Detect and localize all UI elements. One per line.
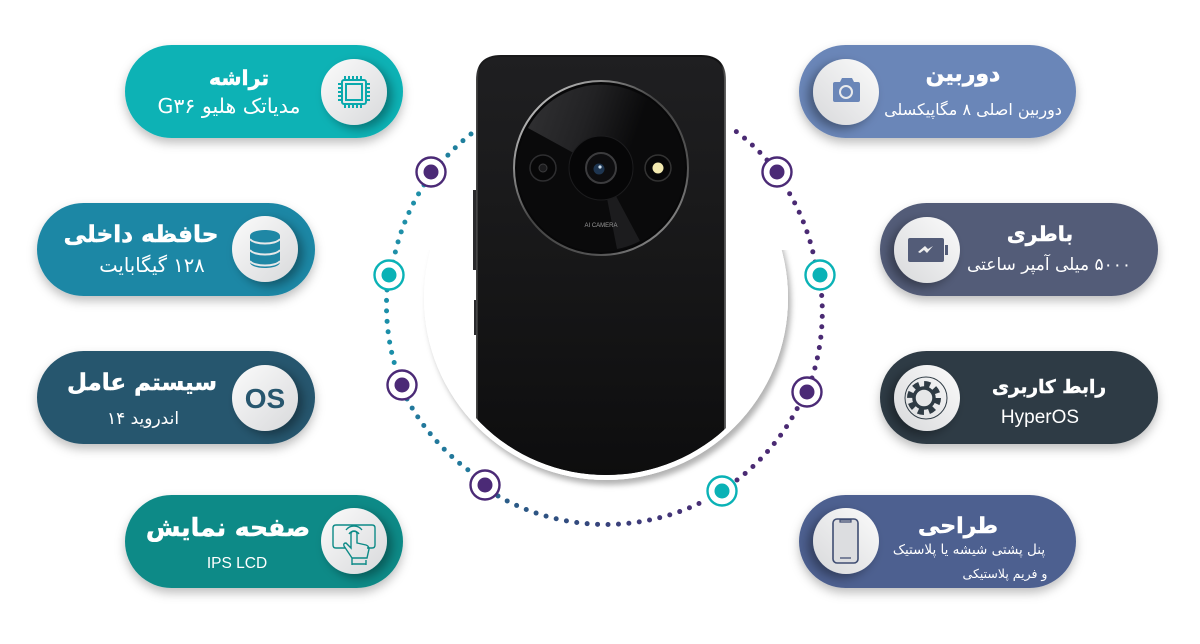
phone: [473, 55, 726, 478]
icon: touch screen: [321, 508, 387, 574]
panel: user interface: [880, 351, 1158, 444]
white circle behind phone: [424, 250, 794, 488]
heading: battery: باطری: [1007, 222, 1073, 246]
phone body: [476, 55, 726, 478]
panel: operating system: [37, 351, 315, 444]
node: bottom left purple: [470, 470, 500, 500]
left lens: [530, 155, 556, 181]
icon: OS: [232, 365, 298, 431]
icon: camera: [813, 59, 879, 125]
heading: user interface: رابط کاربری: [992, 377, 1106, 398]
heading: camera: دوربین: [926, 62, 1000, 87]
camera module: [514, 81, 688, 255]
icon: OS: OS: [245, 383, 285, 414]
text: camera value: دوربین اصلی ۸ مگاپیکسلی: [884, 100, 1062, 120]
text: battery value: ۵۰۰۰ میلی آمپر ساعتی: [967, 253, 1131, 275]
text: user interface value: HyperOS: [1001, 407, 1079, 428]
side buttons: [473, 190, 476, 335]
node: upper right purple: [762, 158, 792, 186]
heading: display: صفحه نمایش: [146, 513, 310, 542]
node: lower left purple: [388, 370, 416, 400]
node: bottom right teal: [708, 476, 736, 506]
heading: operating system: سیستم عامل: [67, 370, 217, 396]
icon: database: [232, 216, 298, 282]
main lens: [569, 136, 633, 200]
panel: display: [125, 495, 403, 588]
node: right teal: [806, 260, 834, 290]
icon: smartphone: [813, 508, 879, 574]
icon: gear: [894, 365, 960, 431]
camera label: AI CAMERA: [584, 223, 618, 229]
icon: battery: [894, 217, 960, 283]
text: design value: پنل پشتی شیشه یا پلاستیک: [893, 542, 1045, 558]
icon: chip: [321, 59, 387, 125]
dotted ring: [386, 127, 822, 524]
text: chip value: مدیاتک هلیو G۳۶: [157, 94, 301, 118]
text: design value: [893, 542, 1047, 582]
text: design value: و فریم پلاستیکی: [963, 566, 1047, 582]
panel: design: [799, 495, 1076, 588]
panel: chip: [125, 45, 403, 138]
node: lower right purple: [792, 378, 822, 406]
panel: camera: [799, 45, 1076, 138]
heading: storage: حافظه داخلی: [64, 221, 218, 248]
heading: design: طراحی: [918, 514, 998, 539]
text: storage value: ۱۲۸ گیگابایت: [99, 254, 205, 277]
text: display value: IPS LCD: [207, 555, 267, 572]
panel: battery: [880, 203, 1158, 296]
flash: [645, 155, 671, 181]
panel: storage: [37, 203, 315, 296]
text: operating system value: اندروید ۱۴: [107, 409, 179, 429]
heading: chip: تراشه: [209, 66, 269, 90]
node: left teal: [374, 260, 404, 290]
node: upper left purple: [416, 158, 446, 186]
